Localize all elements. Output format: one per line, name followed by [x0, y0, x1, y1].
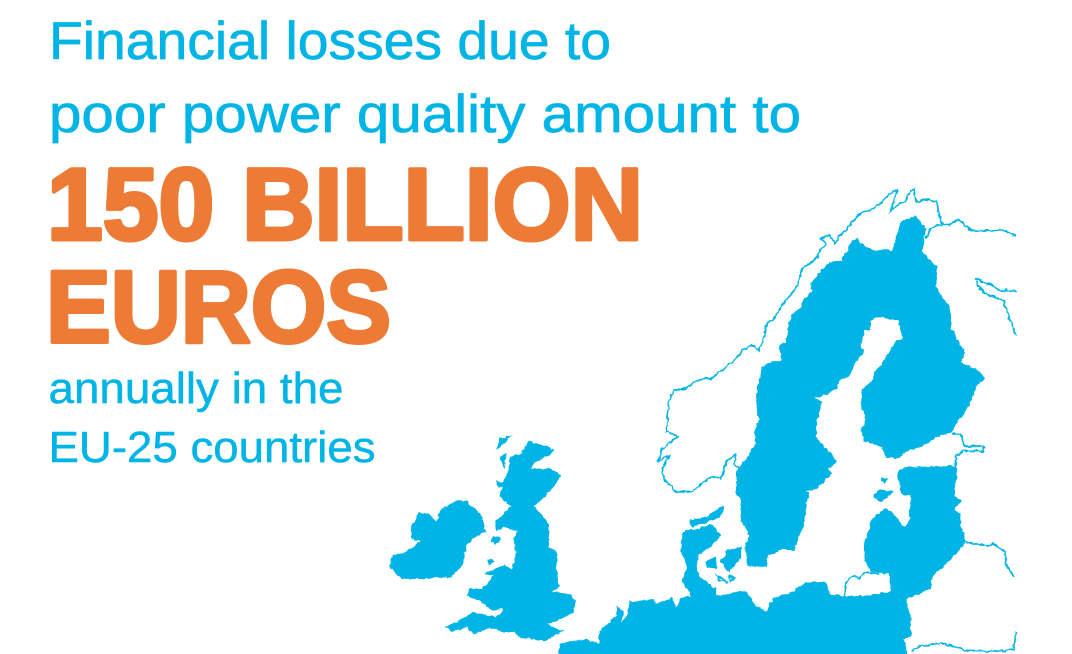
map: Sweden and Finland [736, 216, 985, 567]
map: Norway and northern border outline [658, 189, 1016, 492]
map: Baltic Sea islands [873, 478, 894, 502]
map: Russian border outline near Finland [976, 279, 1016, 336]
map: Danish islands [689, 504, 742, 572]
map: British small islands [487, 435, 512, 565]
subheading: annually in the EU-25 countries: annually in the [48, 364, 344, 413]
subheading: annually in the EU-25 countries: EU-25 countries [48, 423, 376, 472]
heading: financial losses: poor power quality amount to [49, 85, 801, 144]
subheading: annually in the EU-25 countries [48, 364, 376, 472]
heading: financial losses [49, 12, 801, 144]
map: eastern border outlines [717, 434, 1016, 652]
headline figure: 150 billion euros [46, 148, 643, 364]
heading: financial losses: Financial losses due to [49, 12, 611, 71]
map: continental coast and Baltic states [555, 466, 966, 654]
map: Ireland [389, 501, 486, 579]
map of northern Europe [389, 189, 1016, 654]
headline figure: 150 billion euros: 150 BILLION [47, 148, 643, 262]
map: Great Britain [445, 441, 576, 641]
headline figure: 150 billion euros: EUROS [46, 250, 391, 364]
